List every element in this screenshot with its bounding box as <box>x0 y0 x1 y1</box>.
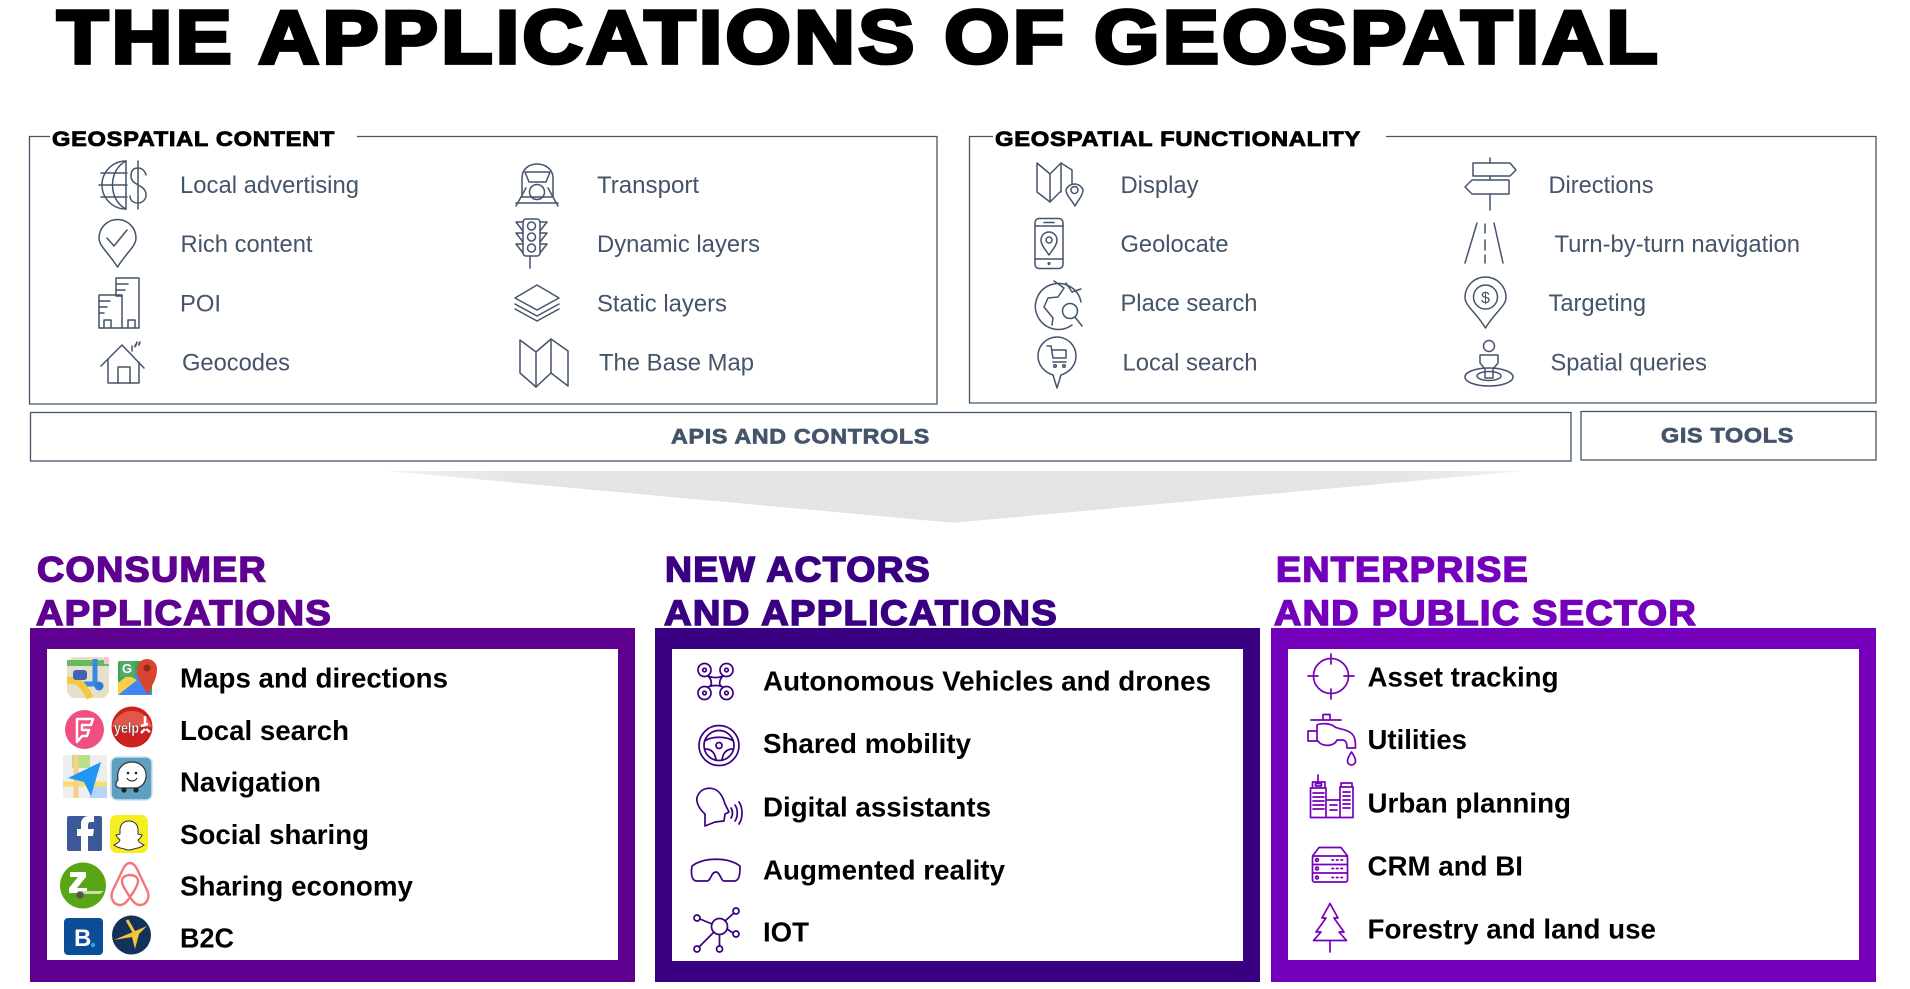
label: geolocate: Geolocate <box>1120 231 1228 258</box>
label: maps and directions: Maps and directions <box>180 662 448 694</box>
label: shared mobility: Shared mobility <box>763 728 971 759</box>
label: rich content: Rich content <box>180 231 313 258</box>
label: static layers: Static layers <box>597 290 727 318</box>
icon: buildings <box>99 278 139 328</box>
panel: new actors and applications <box>655 550 1260 982</box>
icon: drone <box>698 664 733 700</box>
icon: google maps: G <box>122 661 132 676</box>
icon: iot network <box>694 908 739 952</box>
icon: cart pin <box>1038 337 1076 388</box>
icon: city <box>1310 775 1353 818</box>
panel: consumer applications <box>30 550 635 982</box>
label: augmented reality: Augmented reality <box>763 854 1005 886</box>
icon: direction sign <box>1465 158 1516 210</box>
icon: goggles <box>691 859 740 881</box>
icon: globe search <box>1035 281 1082 329</box>
frame: consumer <box>30 628 635 982</box>
label: utilities: Utilities <box>1368 724 1467 755</box>
label: iot: IOT <box>763 916 809 948</box>
panel: enterprise and public sector <box>1271 550 1876 982</box>
icon: expedia <box>112 916 151 954</box>
box: gis tools: GIS TOOLS <box>1661 424 1794 448</box>
icon: booking <box>64 918 103 955</box>
label: navigation: Navigation <box>180 766 321 798</box>
heading: geospatial functionality: GEOSPATIAL FUNCTIONALITY <box>995 128 1361 151</box>
label: digital assistants: Digital assistants <box>763 792 991 822</box>
box: apis and controls <box>30 412 1571 461</box>
icon: folded map <box>520 339 568 387</box>
icon: maps navigation <box>63 755 107 798</box>
icon: house <box>101 342 144 383</box>
arrow: grey downward chevron <box>387 471 1523 523</box>
label: social sharing: Social sharing <box>180 819 369 850</box>
label: b2c: B2C <box>180 922 234 954</box>
label: autonomous vehicles and drones: Autonomous Vehicles and drones <box>763 666 1211 696</box>
icon: facebook <box>67 816 102 851</box>
icon: map with pin <box>1037 163 1083 206</box>
heading: geospatial content: GEOSPATIAL CONTENT <box>52 128 335 151</box>
label: sharing economy: Sharing economy <box>180 870 413 902</box>
icon: phone with pin <box>1035 218 1063 268</box>
icon: road <box>1465 223 1503 263</box>
icon: layers <box>515 285 559 321</box>
icon: yelp <box>112 706 152 748</box>
label: the base map: The Base Map <box>599 350 754 376</box>
label: dynamic layers: Dynamic layers <box>597 231 760 258</box>
heading: new actors and applications: NEW ACTORS <box>665 550 931 590</box>
icon: target pin <box>1465 277 1506 328</box>
label: transport: Transport <box>597 172 699 199</box>
icon: target pin: $ <box>1481 290 1490 307</box>
label: forestry and land use: Forestry and land use <box>1368 914 1656 944</box>
label: geocodes: Geocodes <box>182 350 290 376</box>
icon: talking head <box>697 788 742 826</box>
icon: tree <box>1314 904 1346 952</box>
icon: pin with check <box>99 220 136 267</box>
box: gis tools <box>1581 412 1876 460</box>
label: crm and bi: CRM and BI <box>1368 850 1523 882</box>
icon: google maps <box>118 659 157 695</box>
label: spatial queries: Spatial queries <box>1550 350 1707 376</box>
label: poi: POI <box>180 290 221 318</box>
label: local search: Local search <box>1122 350 1258 376</box>
icon: traffic light <box>516 219 547 268</box>
label: directions: Directions <box>1548 172 1654 199</box>
icon: train <box>516 164 558 206</box>
heading: new actors and applications: AND APPLICATIONS <box>664 594 1058 633</box>
icon: faucet <box>1308 714 1356 765</box>
icon: crosshair <box>1308 654 1354 699</box>
icon: steering wheel <box>699 726 739 766</box>
icon: waze <box>111 757 152 800</box>
label: targeting: Targeting <box>1548 290 1646 317</box>
icon: snapchat <box>110 815 148 853</box>
label: display: Display <box>1120 172 1198 199</box>
heading: consumer applications: CONSUMER <box>37 550 267 590</box>
icon: zipcar <box>60 862 106 908</box>
icon: yelp: yelp <box>114 720 139 737</box>
icon: person on spot <box>1465 340 1513 386</box>
frame: new actors <box>655 628 1260 982</box>
panel: geospatial content <box>30 128 937 404</box>
label: urban planning: Urban planning <box>1368 788 1571 818</box>
heading: enterprise and public sector: ENTERPRISE <box>1276 550 1529 590</box>
label: local advertising: Local advertising <box>180 172 359 199</box>
panel: geospatial functionality <box>970 128 1876 403</box>
heading: consumer applications: APPLICATIONS <box>36 594 332 633</box>
frame: enterprise <box>1271 628 1876 982</box>
icon: apple maps <box>67 657 109 698</box>
label: local search: Local search <box>180 715 349 746</box>
label: turn-by-turn navigation: Turn-by-turn navigation <box>1554 231 1800 258</box>
label: place search: Place search <box>1120 290 1258 317</box>
heading: enterprise and public sector: AND PUBLIC SECTOR <box>1274 594 1697 633</box>
icon: foursquare <box>65 710 104 749</box>
box: apis and controls: APIS AND CONTROLS <box>671 426 930 448</box>
icon: server <box>1312 848 1348 882</box>
icon: booking: B <box>74 925 91 952</box>
label: asset tracking: Asset tracking <box>1368 662 1558 692</box>
icon: globe and dollar <box>99 161 146 209</box>
icon: airbnb <box>112 863 148 905</box>
